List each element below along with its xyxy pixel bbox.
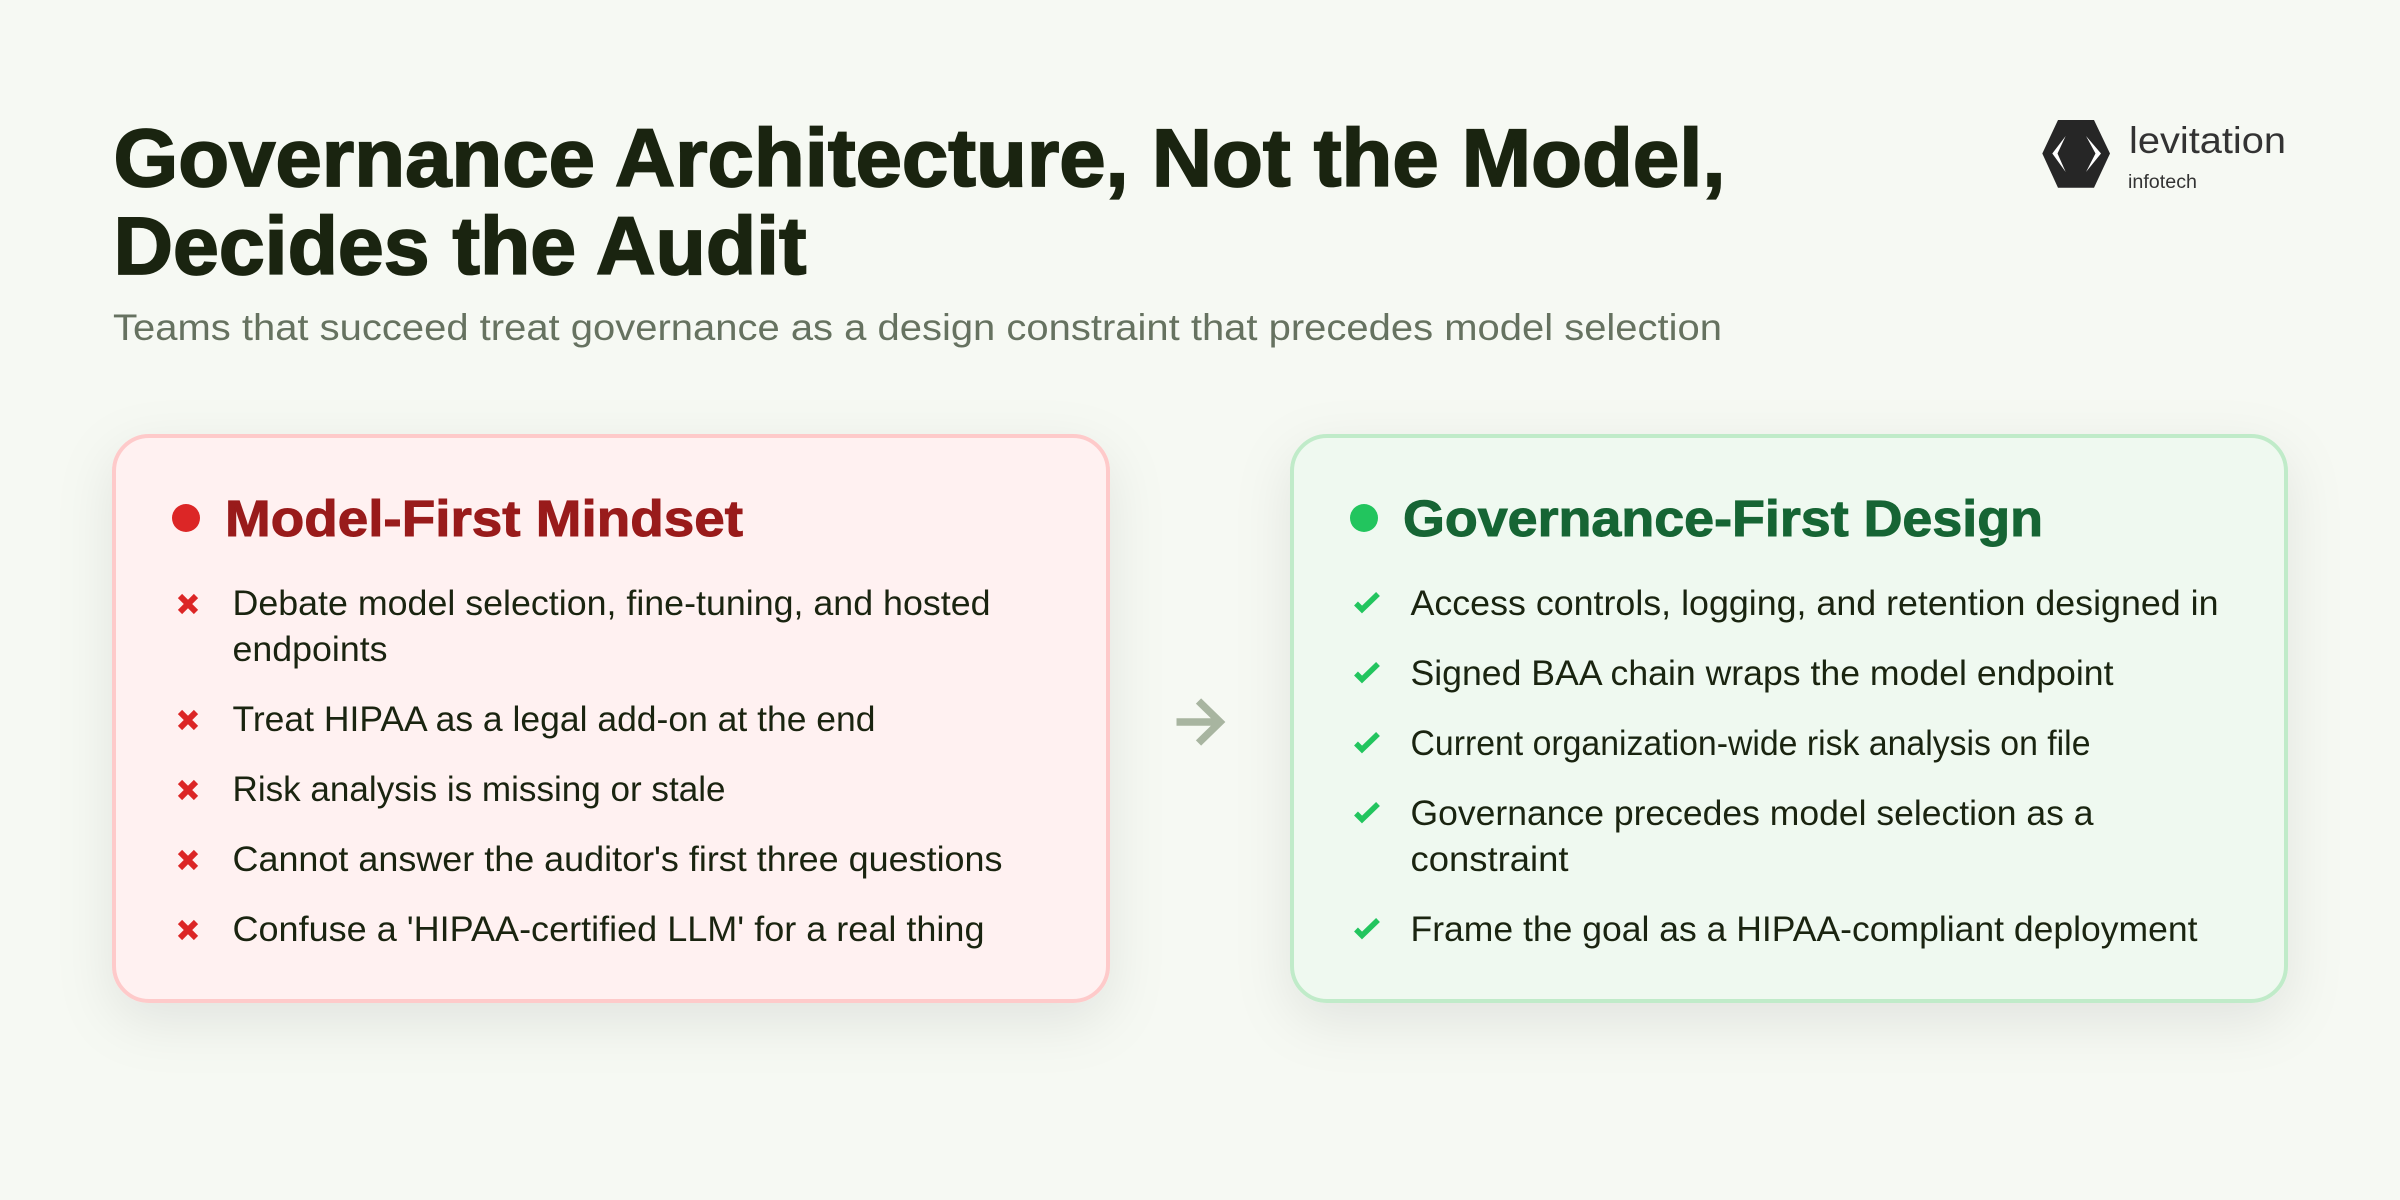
item: governance precedes model selection: Governance precedes model selection as a xyxy=(1410,794,2094,833)
subtitle: Teams that succeed treat governance as a design constraint that precedes model selection xyxy=(113,306,1722,348)
item: governance precedes model selection: constraint xyxy=(1410,840,1569,879)
item: treat HIPAA as add-on: Treat HIPAA as a legal add-on at the end xyxy=(232,700,876,739)
icon: hexagon logo mark xyxy=(2042,120,2110,188)
panel: governance-first design xyxy=(1292,436,2286,1001)
title xyxy=(114,113,1726,292)
title: Governance Architecture, Not the Model, xyxy=(114,113,1726,204)
item: debate model selection: Debate model selection, fine-tuning, and hosted xyxy=(232,584,990,623)
list: model-first items xyxy=(180,584,1002,949)
heading: governance-first design: Governance-First Design xyxy=(1403,490,2043,547)
item: debate model selection xyxy=(180,584,990,669)
logo wordmark: levitation xyxy=(2129,120,2286,161)
item: risk analysis missing: Risk analysis is missing or stale xyxy=(232,770,726,809)
item: debate model selection: endpoints xyxy=(232,630,388,669)
logo: levitation infotech xyxy=(2042,120,2286,193)
list: governance-first items xyxy=(1356,584,2218,949)
item: frame the goal: Frame the goal as a HIPAA-compliant deployment xyxy=(1410,910,2198,949)
item: current risk analysis: Current organization-wide risk analysis on file xyxy=(1410,724,2090,763)
item: signed BAA chain: Signed BAA chain wraps the model endpoint xyxy=(1410,654,2114,693)
item: cannot answer auditor: Cannot answer the auditor's first three questions xyxy=(232,840,1002,879)
item: governance precedes model selection xyxy=(1356,794,2094,879)
item: access controls: Access controls, logging, and retention designed in xyxy=(1410,584,2218,623)
title: Decides the Audit xyxy=(114,201,806,292)
status dot: red xyxy=(172,504,200,532)
heading: model-first mindset: Model-First Mindset xyxy=(225,490,743,547)
item: confuse HIPAA-certified LLM: Confuse a 'HIPAA-certified LLM' for a real thing xyxy=(232,910,984,949)
panel: model-first mindset xyxy=(114,436,1108,1001)
status dot: green xyxy=(1350,504,1378,532)
arrow xyxy=(1176,701,1220,743)
logo sub-wordmark: infotech xyxy=(2128,172,2197,193)
